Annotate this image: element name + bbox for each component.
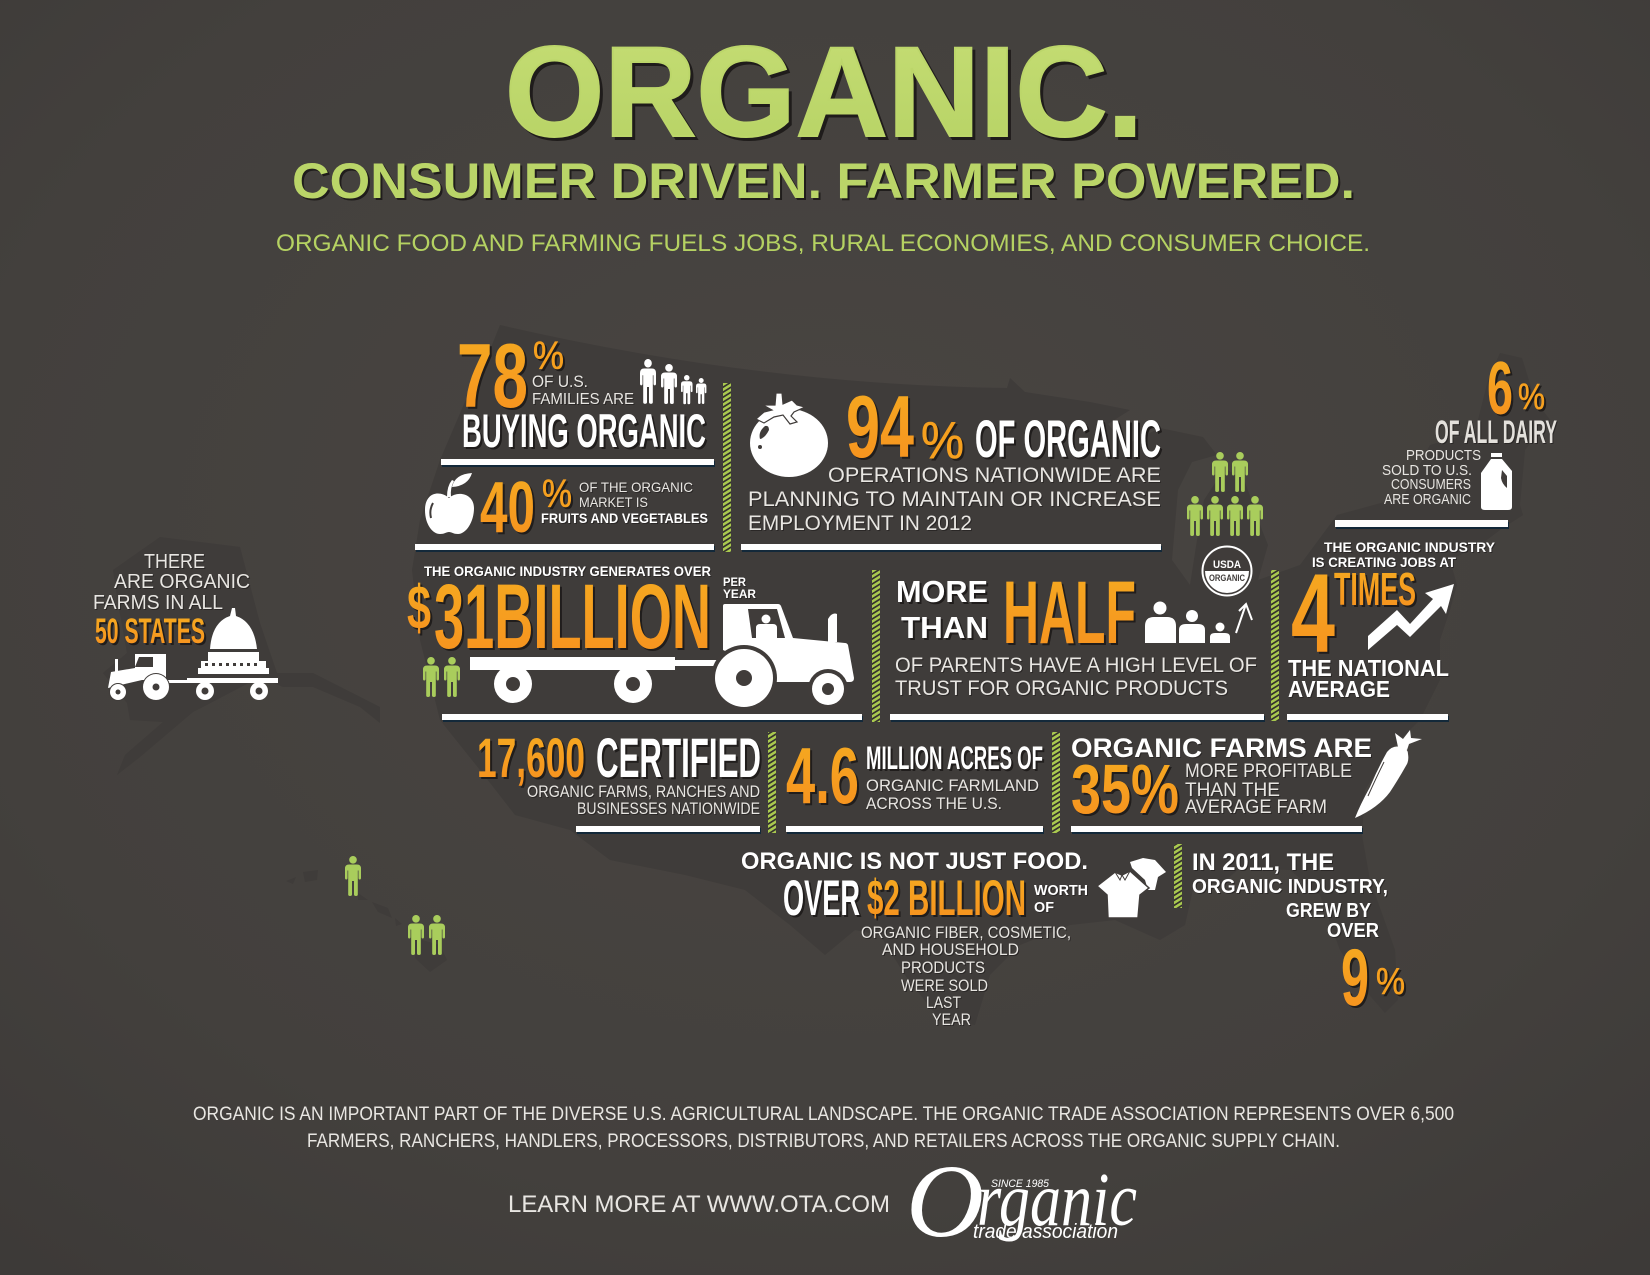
heading: of all dairy: OF ALL DAIRY [1435, 414, 1557, 450]
subtitle: CONSUMER DRIVEN. FARMER POWERED. [292, 153, 1355, 209]
stat: 6%: % [1518, 376, 1545, 417]
icon: shirts [1097, 858, 1166, 918]
text: fiber cosmetic: WERE SOLD [901, 976, 988, 995]
text: fiber cosmetic: LAST [926, 993, 961, 1012]
text: the national average: THE NATIONAL [1288, 655, 1449, 681]
icon: USDA organic seal [1202, 546, 1252, 596]
stat: $31 billion: 31BILLION [434, 566, 711, 668]
text: of parents [895, 654, 1257, 700]
text: of the organic market: FRUITS AND VEGETABLES [541, 510, 708, 526]
text: worth of [1034, 883, 1088, 916]
text: there are organic farms: FARMS IN ALL [93, 592, 223, 614]
text: creating jobs at: IS CREATING JOBS AT [1312, 555, 1457, 570]
text: organic farmland [866, 776, 1039, 813]
tagline: ORGANIC FOOD AND FARMING FUELS JOBS, RURAL ECONOMIES, AND CONSUMER CHOICE. [276, 230, 1370, 257]
text: of the organic market: MARKET IS [579, 494, 648, 510]
text: products sold: PRODUCTS [1406, 447, 1481, 464]
text: products sold: SOLD TO U.S. [1382, 462, 1472, 479]
logo: Organic Trade Association: SINCE 1985 [991, 1178, 1050, 1190]
text: of the organic market [541, 479, 708, 526]
panel: 17,600 certified [477, 726, 761, 818]
panel: 94% of organic [748, 377, 1161, 535]
text: in 2011: OVER [1327, 920, 1380, 942]
text: of U.S. families are: FAMILIES ARE [532, 391, 634, 408]
text: fiber cosmetic [861, 923, 1071, 1029]
text: more profitable: THAN THE [1185, 780, 1280, 801]
text: of the organic market: OF THE ORGANIC [579, 479, 693, 495]
icon: tomato [750, 393, 828, 477]
icon: carrot [1355, 730, 1422, 818]
text: there are organic farms: ARE ORGANIC [114, 571, 250, 593]
stat: $31 billion: $ [407, 574, 431, 643]
panel: 40% fruits and vegetables [425, 468, 708, 548]
text: operations nationwide: EMPLOYMENT IN 2012 [748, 512, 972, 535]
text: in 2011 [1192, 849, 1388, 942]
text: the national average [1288, 655, 1449, 702]
text: of U.S. families are: OF U.S. [532, 372, 588, 391]
call to action: LEARN MORE AT WWW.OTA.COM [508, 1191, 890, 1218]
text: per year [723, 577, 757, 601]
stat: 9%: 9 [1341, 933, 1369, 1023]
stat: 4.6: 4.6 [786, 731, 859, 820]
text: worth of: WORTH [1034, 883, 1088, 899]
text: operations nationwide [748, 464, 1161, 535]
panel: 35% more profitable [1071, 730, 1422, 828]
text: of U.S. families are [532, 372, 634, 408]
panel: more than half [895, 562, 1257, 700]
stat: 78%: 78 [457, 326, 528, 427]
logo: Organic Trade Association [906, 1144, 1137, 1259]
text: farms ranches: ORGANIC FARMS, RANCHES AND [527, 783, 760, 801]
logo: Organic Trade Association: rganic [977, 1158, 1137, 1242]
text: fiber cosmetic: AND HOUSEHOLD [882, 940, 1019, 959]
icon: capitol on trailer [165, 608, 278, 700]
icon: USDA organic seal: ORGANIC [1209, 573, 1245, 583]
logo: Organic Trade Association: trade association [973, 1221, 1118, 1243]
panel: 9% growth [1192, 849, 1405, 1023]
text: industry generates over: THE ORGANIC INDUSTRY GENERATES OVER [424, 563, 711, 579]
text: worth of: OF [1034, 900, 1054, 916]
heading: million acres of: MILLION ACRES OF [866, 740, 1043, 776]
stat: 6%: 6 [1487, 346, 1513, 430]
panel: $31 billion [407, 563, 854, 711]
stat: 94%: % [921, 412, 964, 470]
logo: Organic Trade Association: O [906, 1144, 984, 1259]
panel: 4 times [1288, 540, 1495, 702]
text: in 2011: GREW BY [1286, 900, 1372, 922]
panel: 6% of all dairy [1382, 346, 1557, 510]
stat: 50 states: 50 STATES [95, 612, 205, 651]
text: operations nationwide: PLANNING TO MAINTAIN OR INCREASE [748, 488, 1161, 511]
icon: family [640, 359, 706, 404]
icon: arrow up [1236, 604, 1252, 633]
text: in 2011: ORGANIC INDUSTRY, [1192, 876, 1388, 898]
text: products sold: ARE ORGANIC [1384, 491, 1471, 508]
text: more than [896, 574, 988, 645]
panel: not just food [741, 848, 1166, 1029]
text: organic farmland: ORGANIC FARMLAND [866, 776, 1039, 795]
stat: over $2 billion [783, 870, 1026, 926]
icon: green farmer in Hawaii [345, 856, 361, 896]
stat: $31 billion [407, 566, 711, 668]
icon: green farmers group [1187, 452, 1263, 536]
stat: 17,600 certified: 17,600 [477, 726, 585, 789]
text: per year: YEAR [723, 589, 757, 601]
text: there are organic farms: THERE [144, 551, 205, 573]
text: fiber cosmetic: PRODUCTS [901, 958, 985, 977]
icon: parents and child [1145, 602, 1230, 643]
text: there are organic farms [93, 551, 250, 614]
panel: 78% buying organic [457, 326, 706, 457]
text: farms ranches: BUSINESSES NATIONWIDE [577, 800, 760, 818]
panel: 4.6 million acres [786, 731, 1043, 820]
icon: tractor with trailer [470, 604, 854, 711]
stat: 17,600 certified: CERTIFIED [596, 726, 761, 789]
stat: over $2 billion: $2 BILLION [867, 870, 1026, 926]
text: creating jobs at [1312, 540, 1495, 570]
text: more profitable: MORE PROFITABLE [1185, 761, 1352, 782]
icon: green farmers in Hawaii [408, 915, 445, 955]
text: creating jobs at: THE ORGANIC INDUSTRY [1324, 540, 1495, 555]
footer text: FARMERS, RANCHERS, HANDLERS, PROCESSORS, DISTRIBUTORS, AND RETAILERS ACROSS THE ORGANIC SUPPLY CHAIN. [307, 1131, 1340, 1152]
text: more profitable [1185, 761, 1352, 818]
heading: organic is not just food: ORGANIC IS NOT JUST FOOD. [741, 848, 1088, 875]
stat: 94%: 94 [846, 377, 914, 476]
text: farms ranches [527, 783, 760, 818]
heading: buying organic: BUYING ORGANIC [462, 404, 706, 457]
text: more profitable: AVERAGE FARM [1185, 797, 1327, 818]
text: in 2011: IN 2011, THE [1192, 849, 1334, 876]
stat: 40%: 40 [480, 468, 535, 548]
map of the United States [103, 325, 1550, 1025]
stat: 4 times: 4 [1291, 551, 1335, 676]
text: more than: THAN [901, 610, 988, 645]
text: products sold: CONSUMERS [1391, 476, 1471, 493]
text: fiber cosmetic: YEAR [932, 1010, 971, 1029]
stat: 78%: % [533, 335, 564, 378]
stat: 4 times: TIMES [1334, 563, 1416, 615]
text: operations nationwide: OPERATIONS NATIONWIDE ARE [828, 464, 1161, 487]
icon: USDA organic seal: USDA [1213, 559, 1241, 571]
text: products sold [1382, 447, 1481, 508]
title: ORGANIC. [505, 21, 1143, 164]
icon: milk jug [1481, 453, 1512, 510]
heading: of organic: OF ORGANIC [975, 410, 1161, 469]
icon: green farmers [423, 657, 460, 697]
stat: 35%: 35% [1071, 750, 1179, 828]
stat: 9%: % [1376, 961, 1405, 1002]
stat: 40%: % [542, 473, 572, 516]
icon: small tractor [108, 654, 170, 701]
icon: apple [425, 473, 474, 534]
text: per year: PER [723, 577, 747, 589]
text: organic farmland: ACROSS THE U.S. [866, 794, 1002, 813]
stat: 17,600 certified [477, 726, 761, 789]
text: more than: MORE [896, 574, 988, 609]
panel: 50 states [93, 551, 278, 701]
footer text: ORGANIC IS AN IMPORTANT PART OF THE DIVERSE U.S. AGRICULTURAL LANDSCAPE. THE ORGANIC TRADE ASSOCIATION REPRESENTS OVER 6,500 [193, 1104, 1454, 1125]
footer text [193, 1104, 1454, 1152]
stat: 4 times [1291, 551, 1416, 676]
heading: organic farms are: ORGANIC FARMS ARE [1071, 733, 1372, 763]
text: fiber cosmetic: ORGANIC FIBER, COSMETIC, [861, 923, 1071, 942]
icon: rising arrow [1368, 584, 1454, 650]
stat: over $2 billion: OVER [783, 870, 860, 926]
text: of parents: OF PARENTS HAVE A HIGH LEVEL OF [895, 654, 1257, 677]
text: the national average: AVERAGE [1288, 676, 1390, 702]
text: of parents: TRUST FOR ORGANIC PRODUCTS [895, 677, 1228, 700]
stat: half: HALF [1003, 562, 1136, 662]
